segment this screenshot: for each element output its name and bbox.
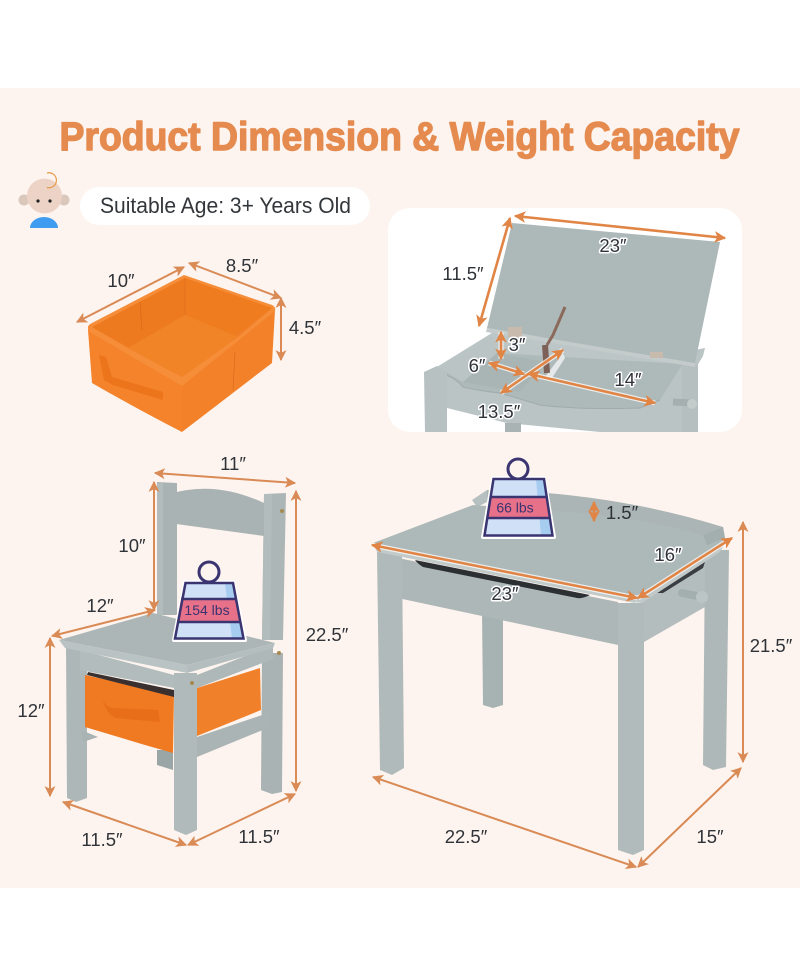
tabletop [373, 505, 727, 602]
interior walls [92, 278, 185, 348]
panel: open lid detail [388, 208, 742, 432]
dimension labels: table: 16″ [654, 544, 682, 565]
age pill [80, 187, 370, 225]
orange drawer [85, 668, 261, 753]
dimension labels: table [372, 502, 793, 867]
basket handle [99, 355, 163, 400]
back rail [487, 490, 725, 542]
right leg [682, 363, 698, 432]
storage basket [88, 275, 275, 432]
dimension labels: table: 22.5″ [445, 826, 488, 847]
outer right face [182, 310, 275, 432]
right leg [703, 550, 729, 770]
aprons and rails [80, 650, 174, 688]
lid labels: 3″ [509, 334, 526, 355]
icon: 66 lbs weight: 66 lbs [496, 500, 534, 516]
dimension labels: chair: 11″ [220, 453, 246, 474]
flipped lid [486, 223, 720, 367]
table [373, 490, 729, 855]
lid labels: 14″ [614, 369, 642, 390]
rear leg [157, 750, 173, 770]
left leg [66, 645, 87, 802]
rail end cap [703, 527, 725, 545]
icon: 66 lbs weight [483, 459, 554, 537]
dimension labels: chair: 12″ [86, 595, 114, 616]
dimension labels: chair: 11.5″ [81, 829, 123, 850]
dimension labels: table: 1.5″ [606, 502, 639, 523]
dimension labels: basket: 4.5″ [289, 317, 322, 338]
chair [59, 482, 286, 835]
arrows [479, 216, 725, 403]
mid leg [505, 423, 521, 432]
knob [682, 591, 708, 603]
icon: 154 lbs weight [174, 562, 245, 640]
stay bar [545, 307, 565, 373]
icon: baby face [18, 173, 70, 228]
dimension labels: table: 21.5″ [750, 635, 793, 656]
front leg [174, 673, 197, 835]
dimension labels: table: 23″ [491, 583, 519, 604]
dimension labels: chair: 22.5″ [306, 624, 349, 645]
floor base [437, 333, 697, 412]
lid labels: 11.5″ [442, 263, 484, 284]
title: Product Dimension & Weight Capacity [60, 115, 740, 159]
back legs and posts [157, 482, 177, 615]
table body below lid [424, 333, 705, 432]
dimension labels: chair: 11.5″ [238, 826, 280, 847]
dimension labels: chair: 10″ [118, 535, 146, 556]
knob [673, 402, 692, 403]
left leg [377, 552, 404, 775]
left leg [424, 366, 447, 432]
lid labels [442, 235, 642, 422]
interior floor [128, 315, 238, 377]
outer left face [88, 330, 182, 432]
far wall [437, 333, 697, 367]
dimension labels: basket: 10″ [107, 270, 135, 291]
aprons [393, 557, 618, 645]
white arrow halos [489, 332, 655, 403]
right leg [261, 653, 283, 794]
tabletop tip [690, 348, 705, 366]
lid labels: 13.5″ [478, 401, 521, 422]
rim [88, 275, 275, 386]
lid labels: 23″ [599, 235, 627, 256]
front panel [437, 365, 682, 432]
dark slots [415, 560, 590, 598]
back leg [482, 610, 503, 708]
hinges [508, 327, 663, 358]
age pill: Suitable Age: 3+ Years Old [100, 193, 351, 218]
icon: 154 lbs weight: 154 lbs [184, 602, 230, 618]
dimension labels: chair [17, 453, 349, 850]
dimension labels: table: 15″ [696, 826, 724, 847]
lid labels: 6″ [469, 355, 486, 376]
small back rail [81, 730, 98, 742]
screws [190, 681, 194, 685]
front leg [618, 603, 644, 855]
dimension labels: chair: 12″ [17, 700, 45, 721]
backrest [169, 489, 264, 536]
divider [545, 353, 565, 378]
dimension labels: basket [77, 255, 322, 360]
seat [59, 613, 275, 665]
dimension labels: basket: 8.5″ [226, 255, 259, 276]
